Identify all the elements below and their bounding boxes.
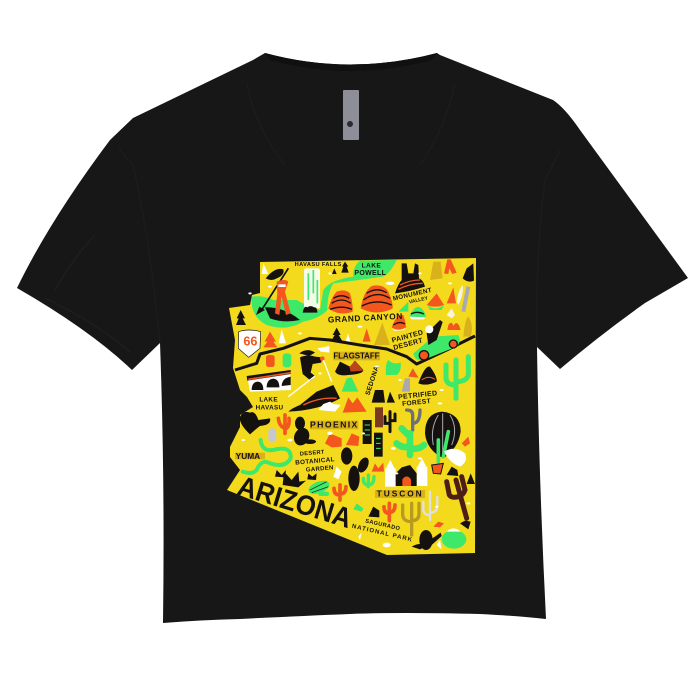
mountain over phoenix: [288, 385, 341, 412]
brown saguaro: [447, 477, 467, 518]
southern place names: [235, 390, 438, 544]
northern place names: GRAND CANYON: [328, 311, 403, 325]
small dark rocks and plants: [353, 467, 475, 529]
northern place names: POWELL: [354, 270, 387, 277]
canyon rocks: [328, 285, 393, 314]
green car with driver: [413, 320, 460, 360]
orange boulders: [325, 433, 359, 447]
arizona wordmark: ARIZONA: [234, 470, 356, 534]
southern map illustrations: [234, 385, 475, 550]
route 66 road: [235, 336, 475, 370]
northern place names: FLAGSTAFF: [333, 352, 380, 361]
agave plants: [275, 470, 317, 487]
grey cactus: [407, 410, 420, 430]
northern place names: MONUMENT: [392, 287, 433, 303]
southern place names: NATIONAL PARK: [351, 524, 413, 544]
green cactus bottom: [363, 475, 374, 487]
southern black prickly pear: [412, 530, 442, 550]
paddle boarder: [256, 268, 300, 321]
black barrel cactus balloon: [425, 412, 470, 474]
northern place names: LAKE: [362, 263, 381, 270]
southern place names: YUMA: [236, 451, 260, 461]
large black prickly pear: [341, 447, 371, 491]
striped green cactus: [307, 478, 331, 496]
monument valley rocks: [395, 263, 425, 293]
northern place names: VALLEY: [408, 295, 429, 306]
waterfall: [303, 268, 320, 313]
orange agave: [372, 463, 444, 527]
building towers: [363, 420, 383, 457]
northern place names: SEDONA: [365, 365, 381, 396]
green lake and river: [252, 260, 397, 328]
phoenix label: PHOENIX: [310, 419, 358, 429]
northern place names: [295, 262, 433, 396]
southern place names: LAKE: [259, 397, 278, 404]
neck label: [343, 90, 359, 140]
southern place names: FOREST: [402, 398, 431, 408]
arizona map shape: [227, 258, 476, 555]
southern place names: TUSCON: [377, 489, 422, 499]
grey barrel: [268, 428, 276, 442]
dark rock spires: [372, 390, 395, 432]
trees: [236, 262, 349, 341]
southern place names: SAGURADO: [365, 518, 401, 532]
painted desert mounds: [392, 307, 426, 331]
round green barrel cactus: [442, 528, 466, 549]
southern place names: BOTANICAL: [295, 456, 335, 467]
green snake: [243, 440, 291, 473]
white scattered marks: [242, 402, 470, 549]
orange cactus pair: [334, 485, 395, 521]
orange rocks near sedona: [343, 397, 367, 413]
southern place names: GARDEN: [306, 465, 334, 474]
ochre and grey saguaro: [403, 503, 419, 535]
northern map illustrations: [235, 259, 475, 398]
northern place names: PAINTED: [391, 329, 424, 345]
northeast rocks and shapes: [398, 259, 474, 337]
northern place names: DESERT: [393, 337, 424, 352]
northern white scattered marks: [248, 272, 452, 391]
heart shaped cactus left: [240, 412, 270, 434]
route 66 sign: [238, 330, 261, 357]
hiker: [266, 346, 332, 397]
mission church: [385, 458, 427, 487]
green flowering cactus: [397, 428, 424, 455]
black prickly pear small: [291, 417, 316, 448]
southern place names: DESERT: [300, 449, 325, 458]
route 66 sign: 66: [243, 335, 257, 349]
northern place names: HAVASU FALLS: [295, 262, 342, 268]
t-shirt body: [17, 53, 688, 623]
orange hand cactus: [278, 415, 289, 433]
southern place names: HAVASU: [256, 404, 284, 411]
southern place names: PETRIFIED: [398, 390, 438, 401]
sedona rocks: [335, 360, 437, 392]
lake havasu bridge: [247, 370, 291, 392]
saguaro cactus: [446, 357, 468, 398]
